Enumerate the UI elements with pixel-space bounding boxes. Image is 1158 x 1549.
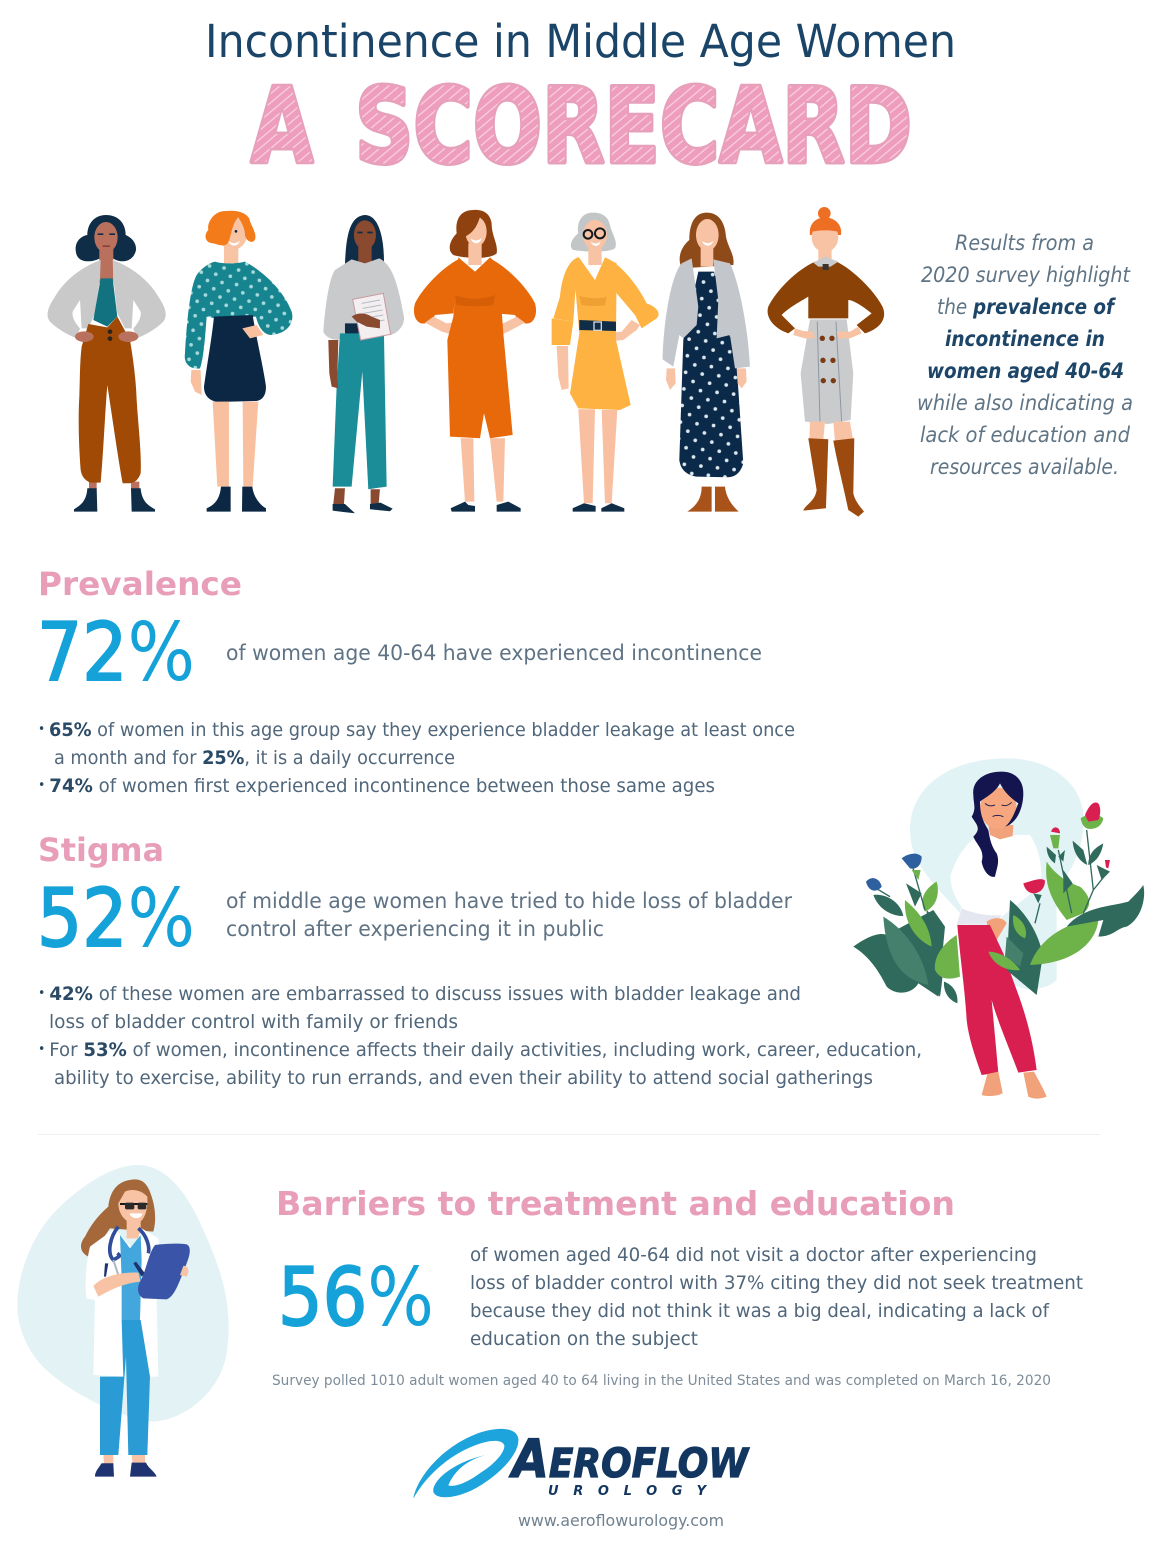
stat 52%: 52%	[37, 872, 195, 965]
woman 3	[323, 215, 404, 513]
stat 72%: 72%	[37, 606, 195, 699]
title	[205, 15, 956, 187]
scorecard heading: SCORECARD	[355, 67, 912, 187]
section: stigma	[37, 831, 922, 1089]
section: prevalence	[37, 565, 795, 797]
intro text: women aged 40-64	[927, 359, 1124, 383]
stigma bullets: • For 53% of women, incontinence affects their daily activities, including work, career, education,	[38, 1039, 922, 1061]
barriers description: education on the subject	[470, 1328, 698, 1350]
barriers description: of women aged 40-64 did not visit a doctor after experiencing	[470, 1244, 1037, 1266]
intro text: Results from a	[955, 231, 1094, 255]
intro text: 2020 survey highlight	[921, 263, 1131, 287]
section: barriers	[272, 1184, 1083, 1389]
woman 6	[663, 213, 750, 512]
urology subtitle: UROLOGY	[548, 1484, 708, 1499]
stigma bullets: loss of bladder control with family or friends	[49, 1011, 458, 1033]
stat description	[226, 889, 792, 942]
survey note: Survey polled 1010 adult women aged 40 to 64 living in the United States and was completed on March 16, 2020	[272, 1373, 1051, 1389]
stigma bullets: ability to exercise, ability to run errands, and even their ability to attend social gatherings	[54, 1067, 873, 1089]
prevalence bullets: a month and for 25%, it is a daily occurrence	[54, 747, 455, 769]
intro text	[917, 231, 1133, 479]
stat description: of middle age women have tried to hide loss of bladder	[226, 889, 792, 914]
woman 7	[768, 207, 884, 517]
hair and face	[972, 772, 1023, 877]
prevalence heading: Prevalence	[38, 565, 242, 603]
prevalence bullets: • 65% of women in this age group say they experience bladder leakage at least once	[38, 719, 795, 741]
woman 1	[48, 215, 166, 512]
barriers description: loss of bladder control with 37% citing they did not seek treatment	[470, 1272, 1083, 1294]
intro text: incontinence in	[945, 327, 1105, 351]
title line: Incontinence in Middle Age Women	[205, 15, 956, 68]
stigma heading: Stigma	[38, 831, 164, 869]
logo	[413, 1429, 750, 1530]
divider	[38, 1134, 1100, 1135]
intro text: while also indicating a	[917, 391, 1133, 415]
barriers description: because they did not think it was a big deal, indicating a lack of	[470, 1300, 1050, 1322]
stat description: of women age 40-64 have experienced incontinence	[226, 641, 762, 666]
illustration: woman with flowers	[853, 758, 1144, 1099]
intro text: resources available.	[930, 455, 1119, 479]
intro text: lack of education and	[920, 423, 1131, 447]
woman 2	[185, 211, 292, 512]
website: www.aeroflowurology.com	[518, 1511, 724, 1530]
scorecard heading: A	[251, 67, 313, 187]
stigma bullets	[38, 983, 922, 1089]
barriers description	[470, 1244, 1083, 1350]
woman 4	[414, 210, 536, 512]
stat 56%: 56%	[278, 1251, 434, 1344]
prevalence bullets	[38, 719, 795, 797]
women illustrations row	[48, 207, 884, 517]
prevalence bullets: • 74% of women first experienced incontinence between those same ages	[38, 775, 715, 797]
stat description: control after experiencing it in public	[226, 917, 604, 942]
barriers heading: Barriers to treatment and education	[276, 1184, 955, 1223]
wordmark: AEROFLOW	[508, 1429, 750, 1490]
intro text: the prevalence of	[937, 295, 1116, 319]
icon: swoosh	[413, 1429, 518, 1499]
woman 5	[552, 213, 659, 512]
illustration: doctor	[17, 1165, 229, 1477]
stigma bullets: • 42% of these women are embarrassed to discuss issues with bladder leakage and	[38, 983, 801, 1005]
